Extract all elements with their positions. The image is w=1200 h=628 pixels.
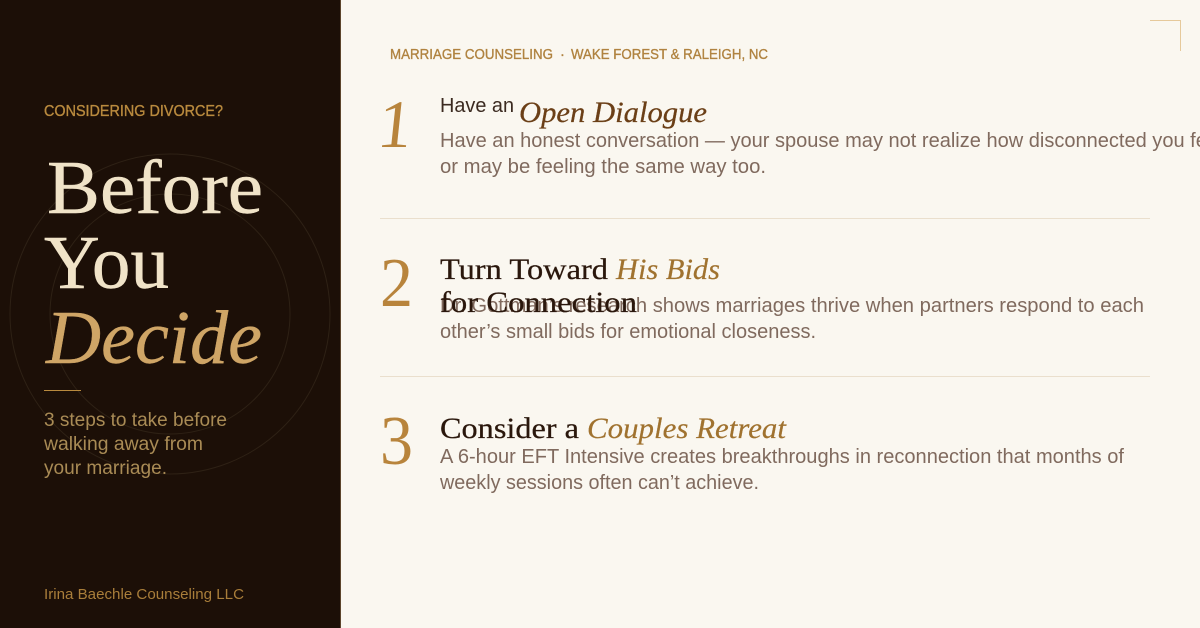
- step 3 description: [439, 446, 1124, 494]
- header: service and location: [390, 47, 768, 63]
- step 3: [380, 403, 1124, 494]
- title: before you decide: You: [44, 221, 169, 305]
- step 2 heading: His Bids: [615, 253, 720, 286]
- number 3: 3: [380, 403, 413, 480]
- eyebrow: considering divorce: CONSIDERING DIVORCE?: [44, 103, 223, 120]
- header: service and location: MARRIAGE COUNSELING: [390, 47, 553, 63]
- step 1 heading: Open Dialogue: [519, 96, 707, 129]
- step 3 heading: Consider a: [440, 412, 579, 445]
- header: service and location: ·: [560, 47, 565, 63]
- step 3 description: A 6-hour EFT Intensive creates breakthroughs in reconnection that months of: [440, 446, 1124, 468]
- step 2 description: other’s small bids for emotional closeness.: [440, 321, 816, 343]
- step 1 description: [440, 130, 1200, 178]
- subtitle: walking away from: [43, 434, 203, 455]
- step 1 heading: [440, 95, 707, 129]
- title: before you decide: [44, 146, 263, 380]
- title: before you decide: Before: [47, 146, 263, 230]
- divider: [380, 376, 1150, 377]
- step 2: [380, 245, 1144, 343]
- accent rule: [44, 390, 81, 391]
- divider: [380, 218, 1150, 219]
- step 3 description: weekly sessions often can’t achieve.: [439, 472, 759, 494]
- subtitle: 3 steps to take before: [44, 410, 227, 431]
- panel: left dark sidebar: [0, 0, 341, 628]
- subtitle: [43, 410, 227, 479]
- step 2 description: [440, 295, 1144, 343]
- step 1 heading: Have an: [440, 95, 514, 117]
- subtitle: your marriage.: [44, 458, 167, 479]
- step 3 heading: [440, 412, 787, 445]
- step 1 description: or may be feeling the same way too.: [440, 156, 766, 178]
- footer: practice name: Irina Baechle Counseling LLC: [44, 586, 244, 603]
- step 2 heading: Turn Toward: [440, 253, 608, 286]
- corner bracket decoration: [1150, 20, 1180, 51]
- step 2 heading: [440, 253, 720, 319]
- step 2 heading: for Connection: [440, 286, 637, 319]
- step 1: [374, 86, 1200, 178]
- number 2: 2: [380, 245, 413, 322]
- step 3 heading: Couples Retreat: [587, 412, 787, 445]
- step 2 description: Dr. Gottman’s research shows marriages thrive when partners respond to each: [440, 295, 1144, 317]
- number 1: 1: [374, 86, 416, 162]
- title: before you decide: Decide: [45, 296, 262, 380]
- header: service and location: WAKE FOREST & RALEIGH, NC: [571, 47, 768, 63]
